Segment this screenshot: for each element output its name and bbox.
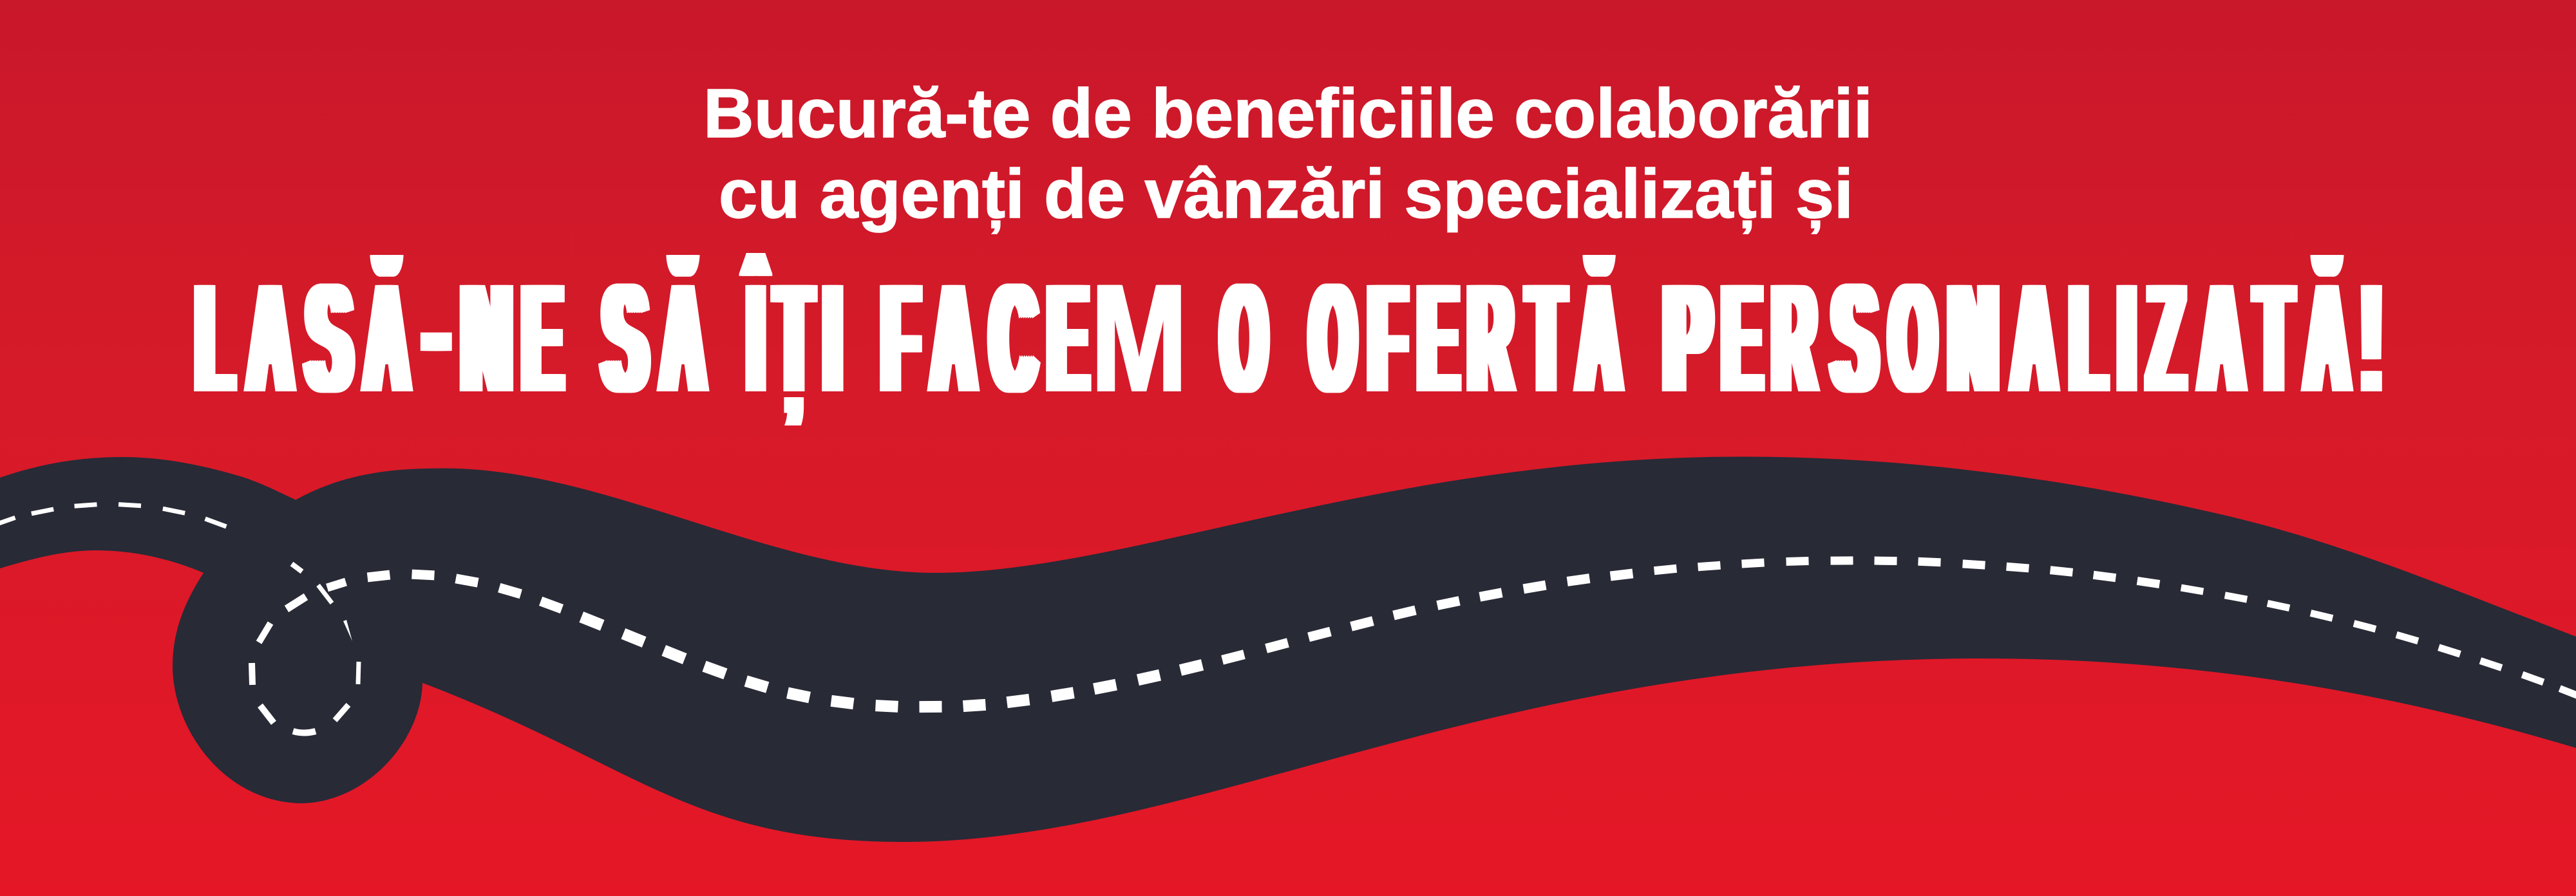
- headline: [194, 242, 2383, 425]
- headline: N: [462, 252, 511, 424]
- headline: F: [882, 252, 919, 424]
- headline: A: [932, 252, 975, 424]
- headline: Ț: [776, 252, 812, 424]
- headline: E: [1048, 252, 1088, 424]
- headline: M: [1091, 252, 1187, 424]
- headline: S: [603, 252, 647, 424]
- dashes: main road, right part: [2148, 583, 2576, 708]
- dashes: loop: [252, 564, 359, 733]
- headline: Ă: [661, 252, 705, 424]
- headline: S: [1833, 252, 1876, 424]
- headline: S: [307, 252, 351, 424]
- road centre dashes: [0, 505, 2576, 733]
- headline: Ă: [1578, 252, 1620, 424]
- headline: Ă: [2306, 252, 2349, 424]
- headline: I: [824, 252, 840, 424]
- headline: I: [2119, 252, 2135, 424]
- headline: P: [1665, 252, 1710, 424]
- headline: R: [1469, 252, 1512, 424]
- headline: E: [523, 252, 562, 424]
- headline: O: [1222, 252, 1267, 424]
- road shape: [0, 457, 2576, 842]
- headline: E: [1419, 252, 1458, 424]
- dashes: main road, middle part: [1191, 570, 1665, 667]
- headline: -: [425, 242, 447, 415]
- headline: T: [2256, 252, 2292, 424]
- headline: A: [2012, 252, 2056, 424]
- headline: T: [1528, 252, 1564, 424]
- headline: A: [249, 252, 292, 424]
- headline: C: [991, 252, 1036, 424]
- headline: F: [1369, 252, 1406, 424]
- headline: Ă: [365, 252, 408, 424]
- dashes: main road, thick part: [551, 605, 1233, 707]
- dashes: main road, left part: [336, 575, 592, 621]
- headline: A: [2200, 252, 2244, 424]
- headline: Z: [2148, 252, 2184, 424]
- headline: E: [1723, 252, 1761, 424]
- headline: R: [1773, 252, 1815, 424]
- dashes: main road, right middle part: [1622, 561, 2192, 590]
- headline: !: [2362, 252, 2382, 424]
- headline: O: [1311, 252, 1356, 424]
- headline: L: [196, 252, 233, 424]
- subtitle: first line: Bucură-te de beneficiile colaborării: [703, 75, 1873, 152]
- headline: O: [1890, 252, 1935, 424]
- headline: N: [1949, 252, 1996, 424]
- headline: Î: [748, 252, 764, 424]
- subtitle: second line: cu agenți de vânzări specializați și: [719, 155, 1853, 234]
- dashes: upper left road: [0, 505, 258, 542]
- headline: L: [2070, 252, 2106, 424]
